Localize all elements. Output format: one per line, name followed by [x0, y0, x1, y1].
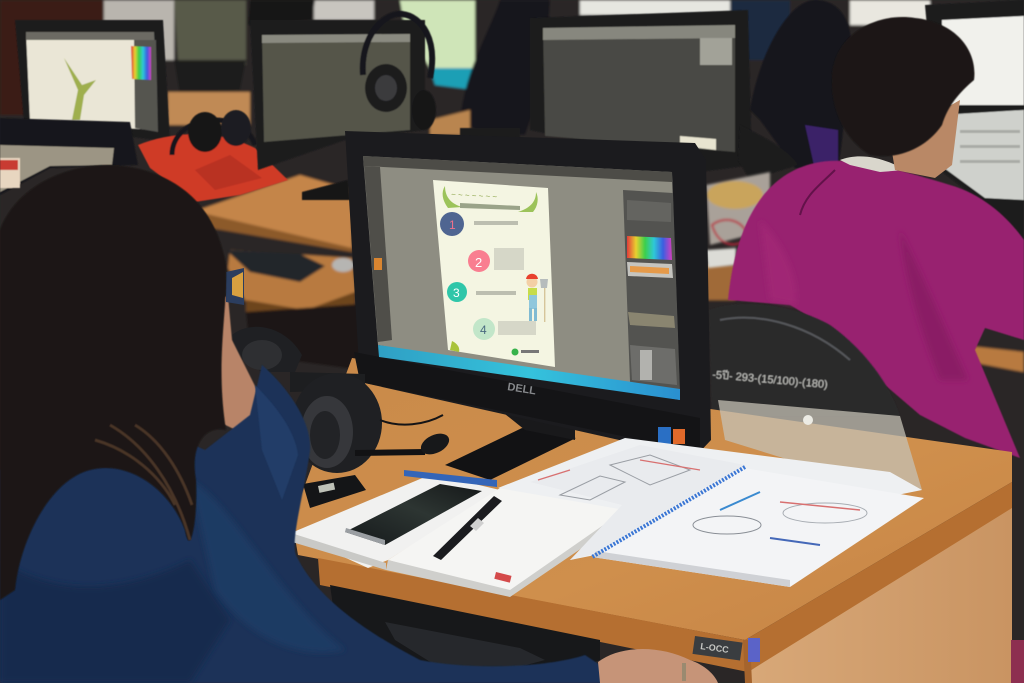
chalk writing on chair: -5ปี- 293-(15/100)-(180) [712, 368, 828, 391]
jacket shadow folds [0, 560, 230, 683]
back person hair [460, 0, 550, 135]
step 1: 1 [449, 218, 456, 232]
right tool panels [623, 190, 680, 392]
glasses [226, 268, 244, 305]
person: woman in purple top [728, 17, 1024, 458]
step 3: 3 [453, 286, 460, 300]
desk mid [198, 175, 352, 250]
desk top surface [292, 358, 1012, 640]
hand with ring [598, 649, 718, 683]
hair [0, 165, 226, 600]
edge label tag [692, 636, 743, 661]
headphones on desk [232, 327, 452, 473]
farmer character [526, 274, 548, 322]
person: woman in blue jacket [0, 165, 718, 683]
back monitor left with plant [15, 20, 170, 142]
notebook left [291, 474, 626, 597]
step 1 [440, 212, 518, 236]
under-desk keyboard tray [330, 585, 600, 683]
desk side panel [748, 508, 1012, 683]
shoe at right edge [1011, 640, 1024, 683]
items on back desk [706, 172, 770, 268]
front desk [292, 358, 1012, 683]
back monitor top centre [174, 0, 246, 65]
neck and face [890, 100, 960, 178]
poster heading: ~ ~ ~ ~ ~ ~ ~ [451, 190, 498, 201]
office chair [709, 304, 900, 416]
glare plastic folder [718, 400, 922, 490]
right desk far [960, 345, 1024, 372]
face sliver and hand [212, 296, 262, 432]
purple top [728, 161, 1024, 458]
step 2: 2 [475, 255, 482, 270]
screen [363, 156, 680, 400]
hair [832, 17, 974, 156]
person: back right long hair [738, 0, 851, 180]
desk edge band [318, 482, 1012, 672]
red bag and headphones [138, 110, 288, 202]
taskbar [378, 345, 680, 400]
black pen [433, 496, 502, 560]
hair highlights [95, 425, 192, 540]
poster document [433, 180, 555, 367]
black power bank [303, 475, 366, 508]
sticker badges [658, 427, 671, 444]
collar [840, 156, 905, 172]
step 4: 4 [480, 323, 487, 337]
technical diagrams [693, 516, 761, 534]
blue pen [404, 470, 497, 487]
spiral binding [592, 467, 745, 557]
monitor: back right [460, 10, 752, 172]
keyboard shelf [228, 250, 356, 312]
contact icon [512, 348, 518, 356]
step 4 [473, 318, 536, 340]
dell logo: DELL [507, 381, 537, 397]
leaf [450, 341, 459, 352]
monitor: front left partially visible [0, 118, 138, 195]
step 3 [447, 282, 516, 302]
main monitor [345, 131, 711, 457]
monitor: back centre with headphones [250, 14, 436, 200]
back desk top [168, 92, 250, 125]
colour picker [627, 236, 672, 260]
smartphone [345, 484, 482, 545]
monitor stand [445, 410, 576, 480]
edge label text: L-OCC [700, 641, 730, 655]
open workbook with spiral [498, 438, 924, 587]
back monitor with bright screen [400, 0, 475, 68]
step 2 [468, 248, 524, 272]
monitor: top right [925, 0, 1024, 240]
jacket [0, 365, 615, 683]
